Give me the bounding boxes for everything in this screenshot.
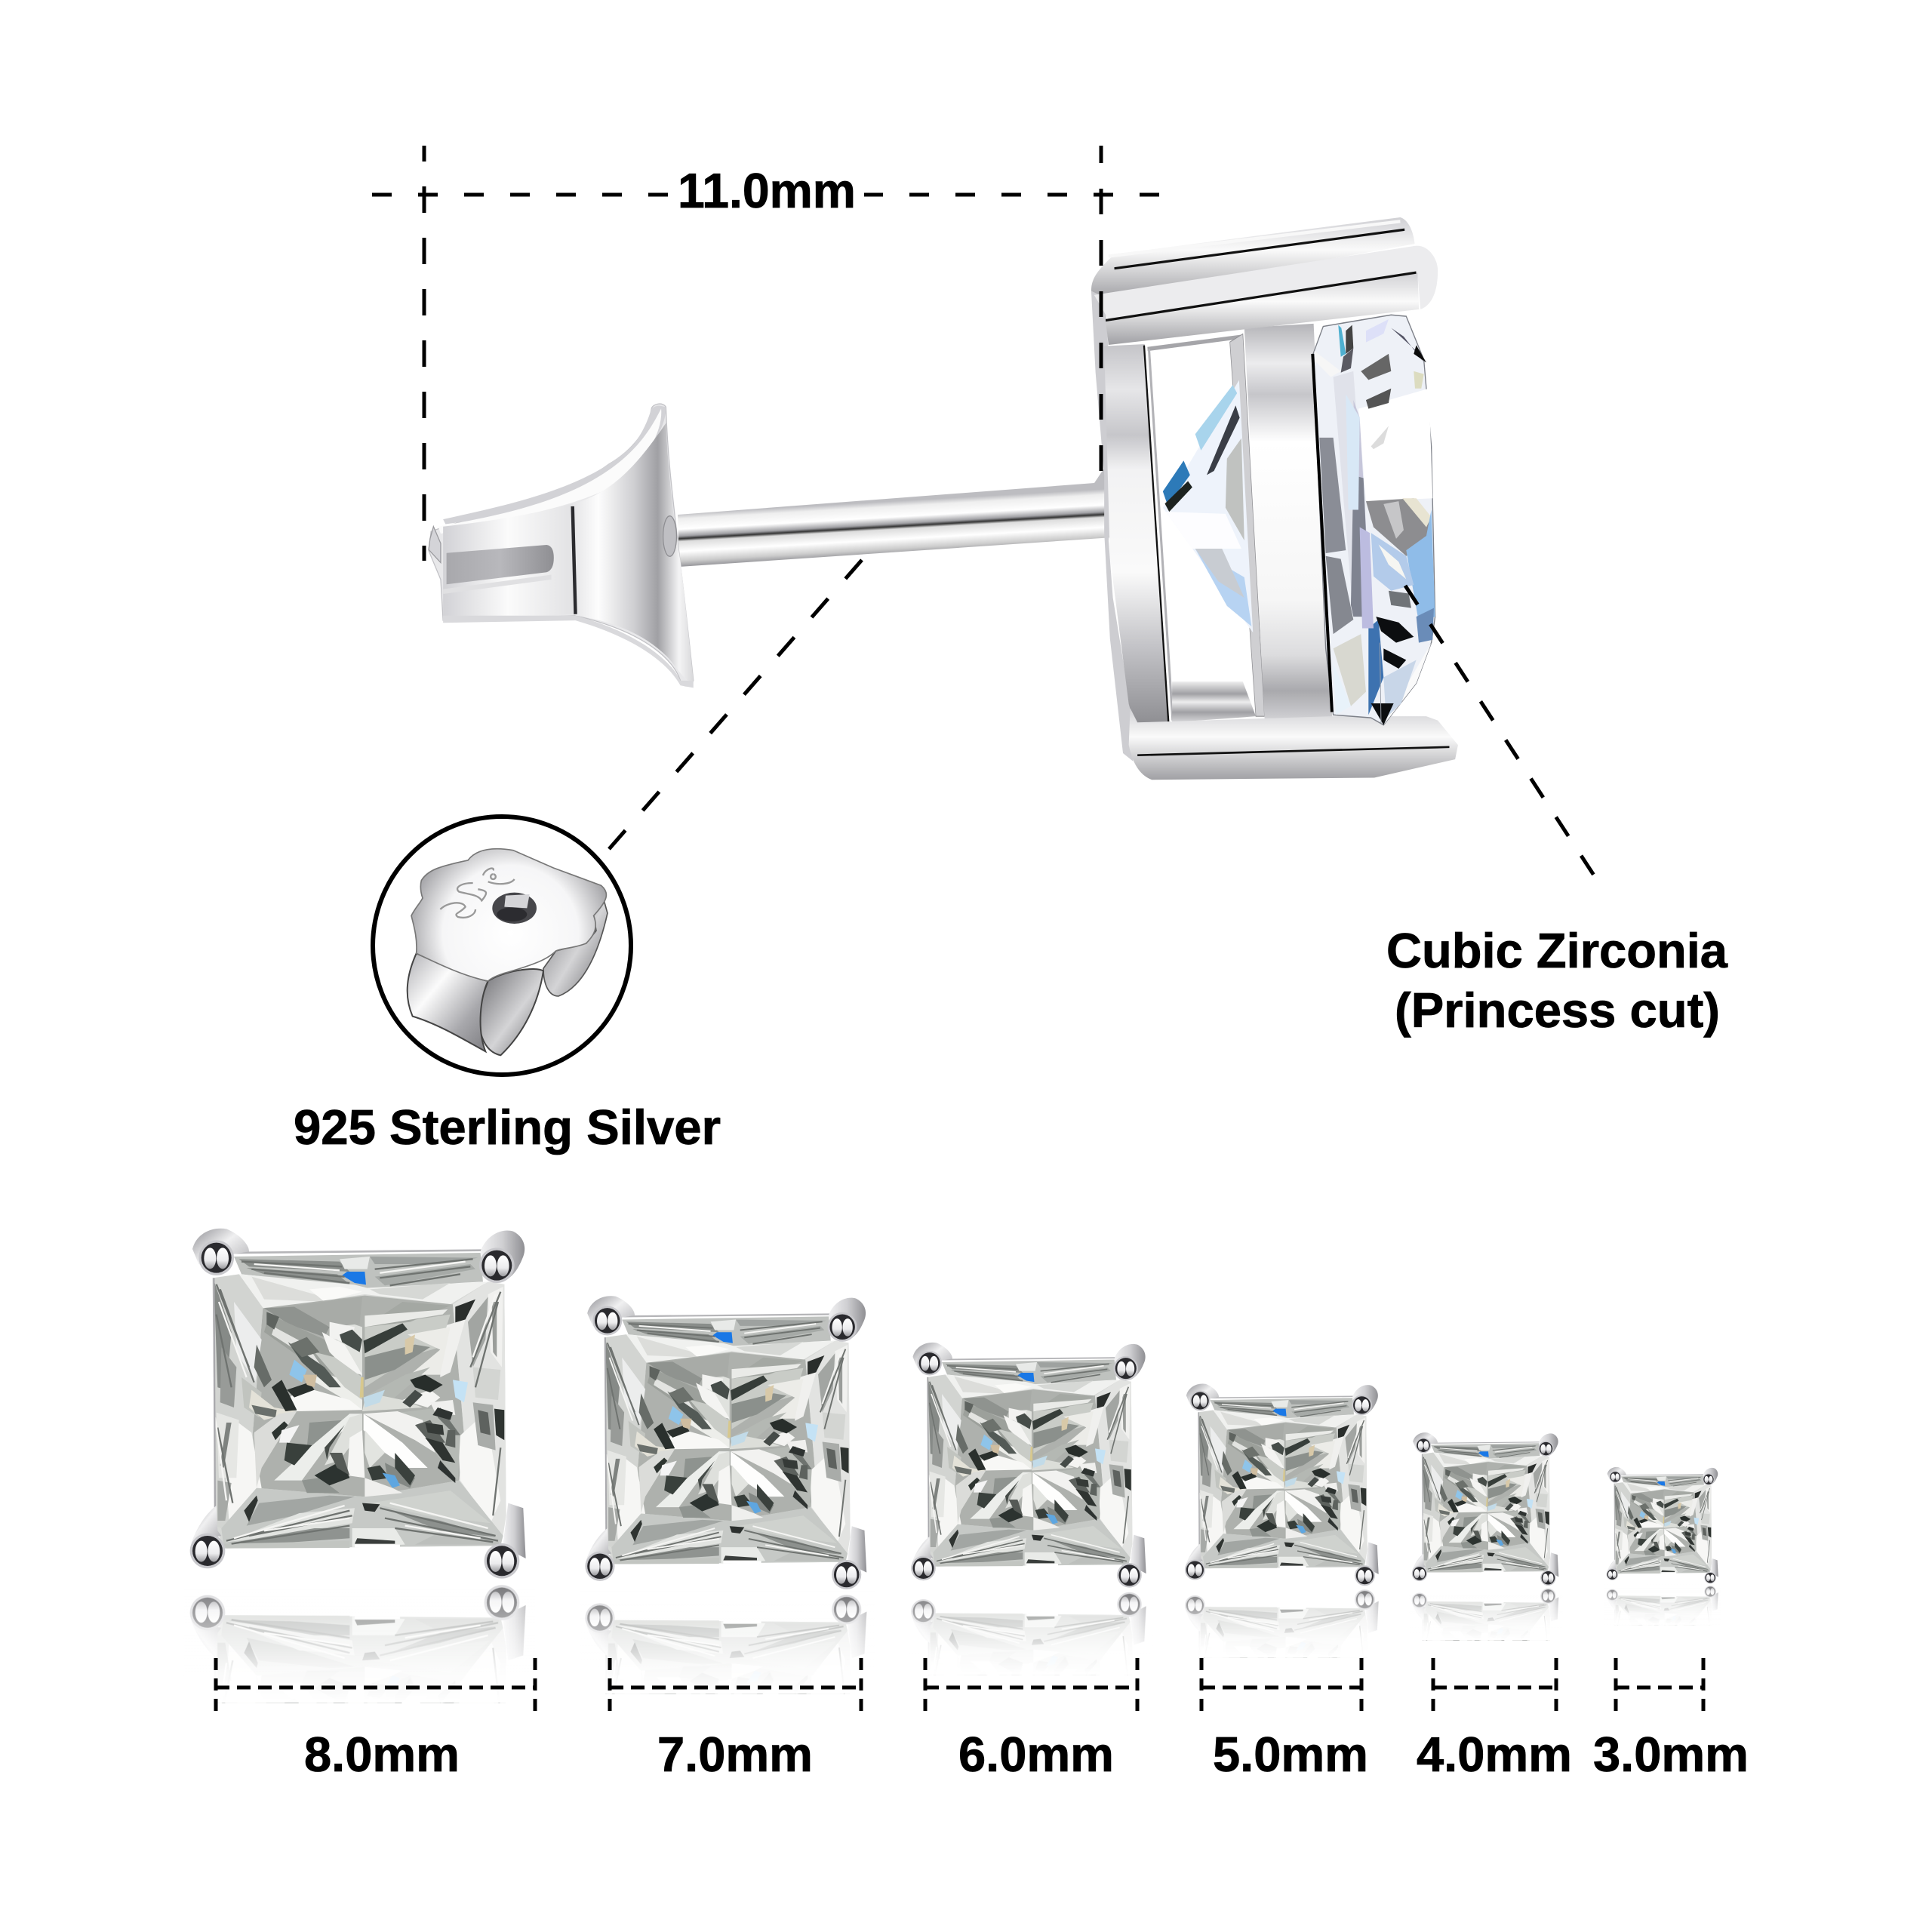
earring back clutch, side view [429, 404, 694, 688]
middle band of the setting [1244, 324, 1332, 718]
size scale: 5.0mm: 5.0mm [1213, 1727, 1368, 1782]
size scale: 7.0mm: 7.0mm [657, 1727, 813, 1782]
size scale: 7.0mm [610, 1658, 861, 1782]
far side of the setting [1091, 287, 1133, 761]
label: material: 925 Sterling Silver [294, 1100, 721, 1155]
gem: 7.0mm stud with reflection [580, 1296, 875, 1888]
size scale: 5.0mm [1201, 1658, 1368, 1782]
window opening frame [1146, 334, 1267, 724]
left band of the setting [1104, 344, 1169, 724]
leader line to stone label [1405, 586, 1598, 882]
size scale: 6.0mm: 6.0mm [958, 1727, 1114, 1782]
earring head and prong setting, side view [1091, 217, 1458, 780]
label: stone type: (Princess cut) [1395, 983, 1720, 1038]
gem: 8.0mm stud with reflection [183, 1229, 536, 1932]
gem: 6.0mm stud with reflection [906, 1343, 1153, 1837]
top prong rails [1091, 217, 1438, 345]
bottom prong rail [1129, 708, 1458, 780]
size scale: 3.0mm: 3.0mm [1593, 1727, 1749, 1782]
size scale: 6.0mm [925, 1658, 1137, 1782]
gem: 5.0mm stud with reflection [1181, 1384, 1384, 1792]
size scale: 3.0mm [1593, 1658, 1749, 1782]
gem: 4.0mm stud with reflection [1409, 1432, 1563, 1742]
size scale: 4.0mm: 4.0mm [1417, 1727, 1572, 1782]
label: stone type [1386, 923, 1728, 1038]
earring post [678, 469, 1113, 567]
leader line to clutch detail [609, 560, 862, 849]
size scale: 4.0mm [1417, 1658, 1572, 1782]
size scale: 8.0mm [216, 1658, 535, 1782]
size scale: 8.0mm: 8.0mm [304, 1727, 460, 1782]
pavilion of the gem seen through the window [1163, 380, 1253, 632]
circular detail: butterfly earring back [373, 817, 631, 1075]
cubic zirconia stone, side view [1312, 315, 1435, 725]
label: stone type: Cubic Zirconia [1386, 923, 1728, 978]
infographic canvas [190, 146, 1746, 1772]
dimension: overall length 11.0mm: 11.0mm [678, 163, 856, 218]
gem: 3.0mm stud with reflection [1604, 1467, 1721, 1703]
